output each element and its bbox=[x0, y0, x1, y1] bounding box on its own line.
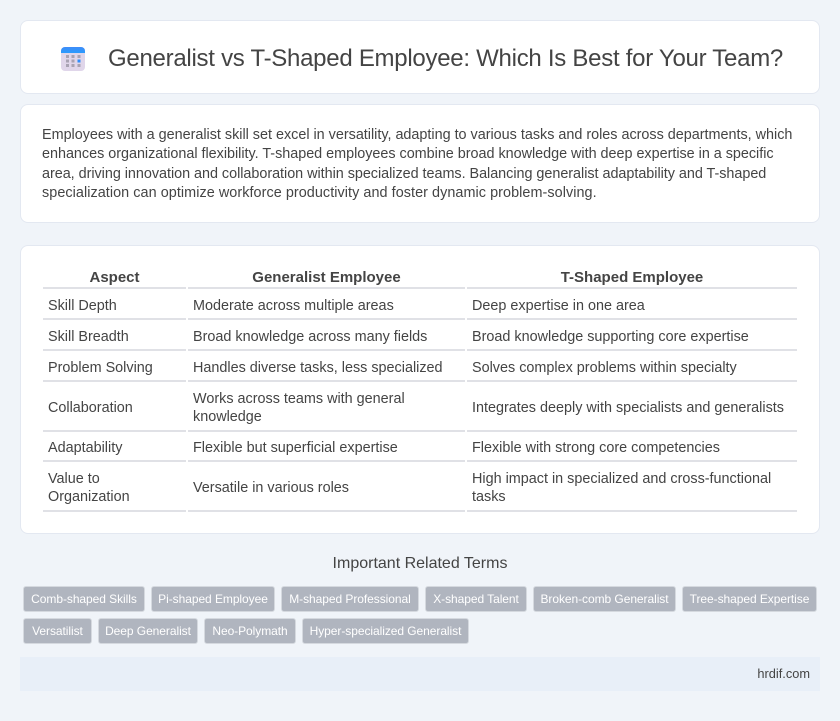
related term tags: Comb-shaped Skills bbox=[31, 592, 137, 606]
icon: calendar bbox=[61, 47, 85, 71]
related term tags: Hyper-specialized Generalist bbox=[310, 624, 461, 638]
title: Generalist vs T-Shaped Employee: Which Is Best for Your Team? bbox=[108, 45, 783, 72]
footer source: hrdif.com bbox=[757, 666, 810, 681]
table rows: Broad knowledge supporting core expertise bbox=[472, 329, 749, 345]
table rows: knowledge bbox=[193, 409, 262, 425]
related term tags: Tree-shaped Expertise bbox=[690, 592, 809, 606]
panel: comparison table bbox=[20, 245, 820, 534]
related term tags bbox=[23, 586, 817, 644]
table rows: High impact in specialized and cross-functional bbox=[472, 471, 771, 487]
panel: introduction bbox=[20, 104, 820, 223]
intro text: Employees with a generalist skill set excel in versatility, adapting to various tasks and roles across departments, which bbox=[42, 127, 792, 143]
table header: T-Shaped Employee bbox=[561, 269, 703, 286]
related term tags: Neo-Polymath bbox=[212, 624, 288, 638]
table rows: Versatile in various roles bbox=[193, 480, 349, 496]
table rows: Skill Breadth bbox=[48, 329, 129, 345]
table rows: Skill Depth bbox=[48, 298, 117, 314]
intro text: specialization can optimize workforce productivity and foster dynamic problem-solving. bbox=[42, 185, 597, 201]
table header bbox=[89, 269, 703, 286]
intro text: enhances organizational flexibility. T-shaped employees combine broad knowledge with deep expertise in a specific bbox=[42, 146, 774, 162]
table rows: Flexible with strong core competencies bbox=[472, 440, 720, 456]
table rows: Integrates deeply with specialists and generalists bbox=[472, 400, 784, 416]
panel: title card bbox=[20, 20, 820, 94]
table header: Generalist Employee bbox=[252, 269, 401, 286]
intro text: area, driving innovation and collaboration within specialized teams. Balancing generalist adaptability and T-shaped bbox=[42, 166, 766, 182]
related term tags: Pi-shaped Employee bbox=[158, 592, 268, 606]
heading: important related terms: Important Related Terms bbox=[333, 555, 507, 572]
table rows: Organization bbox=[48, 489, 130, 505]
table rows: Value to bbox=[48, 471, 100, 487]
related term tags: Deep Generalist bbox=[105, 624, 191, 638]
table rows: Deep expertise in one area bbox=[472, 298, 645, 314]
table rows: Handles diverse tasks, less specialized bbox=[193, 360, 443, 376]
intro text bbox=[42, 127, 792, 201]
table rows: tasks bbox=[472, 489, 506, 505]
table rows: Broad knowledge across many fields bbox=[193, 329, 427, 345]
related term tags: Broken-comb Generalist bbox=[540, 592, 669, 606]
table rows: Flexible but superficial expertise bbox=[193, 440, 398, 456]
related term tags: M-shaped Professional bbox=[289, 592, 411, 606]
footer bbox=[20, 657, 820, 691]
table rows: Moderate across multiple areas bbox=[193, 298, 394, 314]
table rows: Solves complex problems within specialty bbox=[472, 360, 737, 376]
table header: Aspect bbox=[89, 269, 140, 286]
table rows: Problem Solving bbox=[48, 360, 153, 376]
table rows: Adaptability bbox=[48, 440, 122, 456]
related term tags: Versatilist bbox=[32, 624, 83, 638]
table rows bbox=[43, 287, 797, 512]
table rows: Works across teams with general bbox=[193, 391, 405, 407]
related term tags: X-shaped Talent bbox=[433, 592, 519, 606]
table rows: Collaboration bbox=[48, 400, 133, 416]
